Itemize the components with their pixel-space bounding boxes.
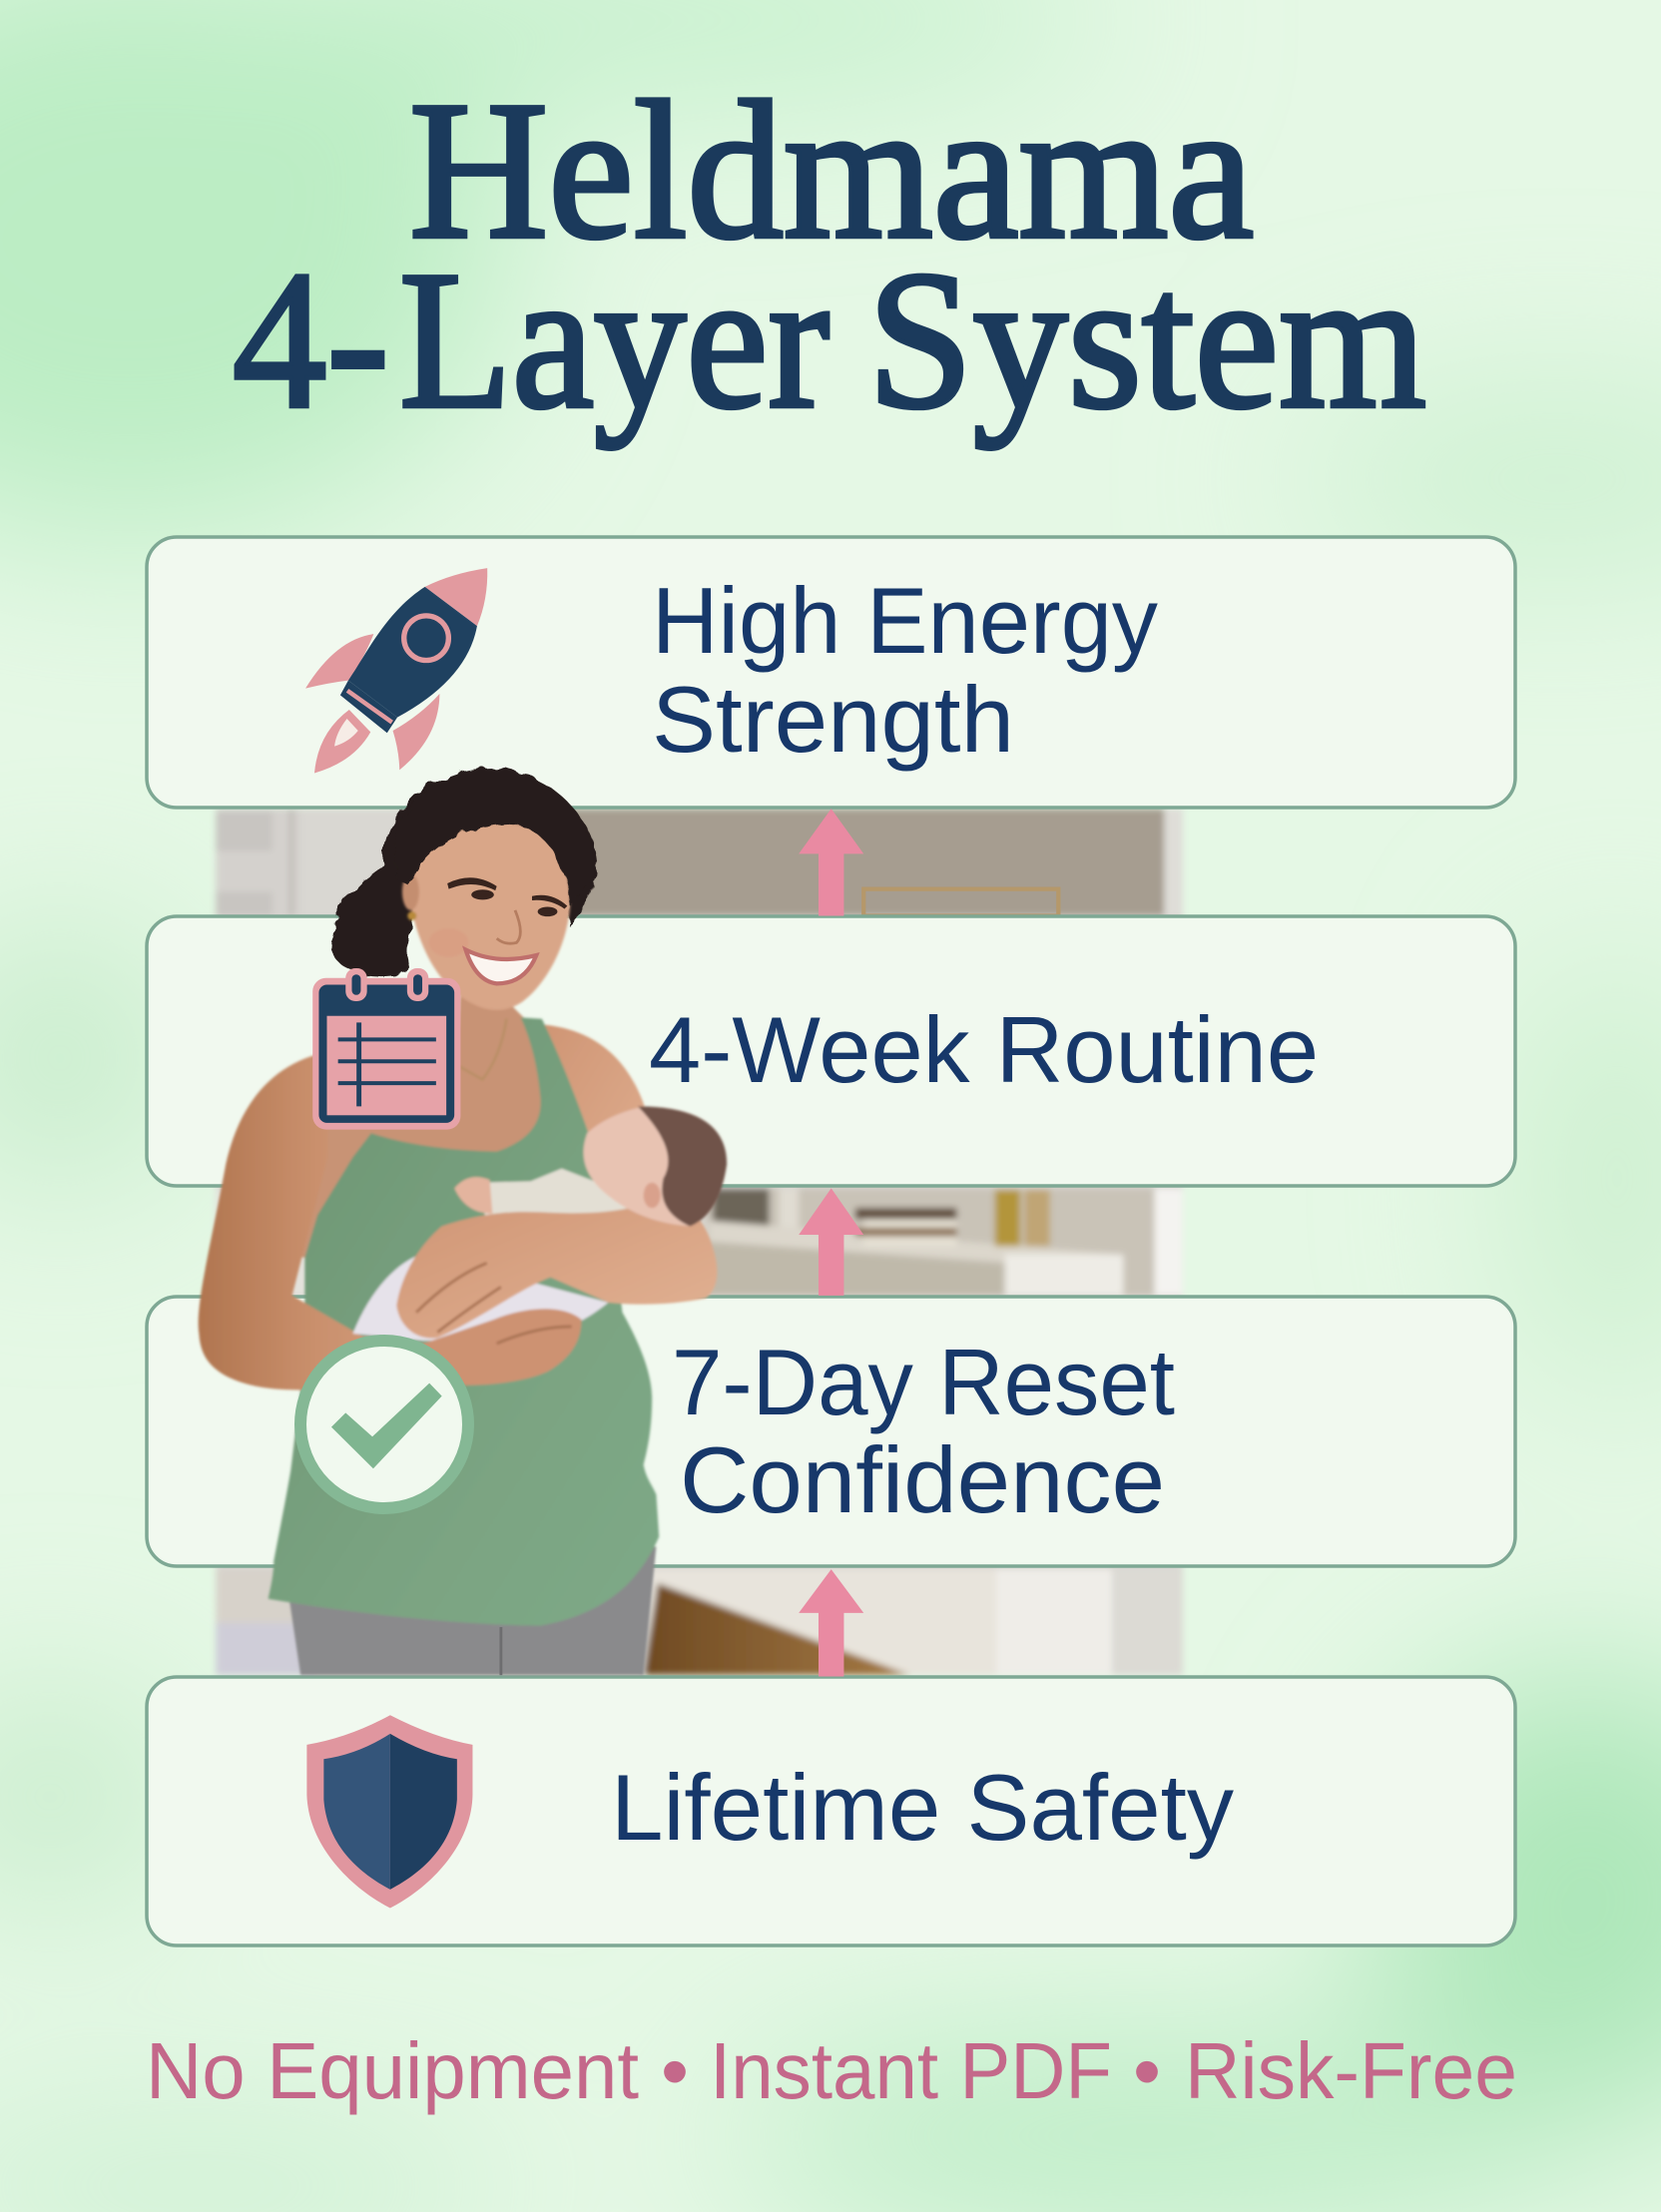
- lower hand: [423, 1309, 581, 1390]
- left arm: [199, 1051, 451, 1390]
- title: Heldmama: [409, 61, 1254, 279]
- title: 4-: [233, 231, 389, 449]
- photo: mother holding baby: [199, 768, 727, 1675]
- label: High Energy Strength: [652, 568, 1158, 772]
- title: [233, 61, 1426, 449]
- cheeks: [429, 928, 468, 957]
- right shoulder and upper arm: [542, 1024, 666, 1228]
- footer tagline: [146, 2026, 1517, 2115]
- nose shadow: [497, 910, 520, 943]
- baby head: [584, 1106, 727, 1227]
- baby lower blanket: [352, 1253, 608, 1341]
- panel: Lifetime Safety: [147, 1677, 1515, 1945]
- label: High Energy Strength: High Energy: [652, 568, 1158, 673]
- footer tagline: No Equipment: [146, 2026, 639, 2115]
- icon: rocket: [305, 568, 487, 773]
- forearm and hand: [396, 1197, 717, 1339]
- label: Lifetime Safety: Lifetime Safety: [611, 1755, 1234, 1860]
- footer tagline: •: [1133, 2026, 1161, 2115]
- baby hair: [638, 1106, 727, 1227]
- smile: [466, 949, 536, 983]
- label: 7-Day Reset Confidence: Confidence: [680, 1427, 1165, 1532]
- chest and neck: [299, 995, 557, 1258]
- hair top: [394, 768, 593, 906]
- baby ear: [644, 1183, 661, 1208]
- footer tagline: Instant PDF: [710, 2026, 1112, 2115]
- panel: 4-Week Routine: [147, 916, 1515, 1186]
- label: 7-Day Reset Confidence: [672, 1330, 1175, 1532]
- earring: [407, 911, 416, 920]
- hair back: [330, 768, 597, 976]
- finger shadows: [416, 1263, 572, 1344]
- tank top: [269, 1017, 659, 1626]
- background photo: room: [216, 809, 1183, 1675]
- baby hand: [454, 1177, 492, 1214]
- label: High Energy Strength: Strength: [652, 667, 1014, 772]
- icon: check badge: [300, 1341, 468, 1508]
- panel: High Energy Strength: [147, 537, 1515, 808]
- footer tagline: •: [661, 2026, 689, 2115]
- arrow 3: [799, 1569, 863, 1677]
- footer tagline: Risk-Free: [1185, 2026, 1517, 2115]
- eyes and brows: [447, 877, 567, 916]
- ear: [402, 873, 419, 910]
- title: Layer: [399, 231, 830, 449]
- arrow 2: [799, 1188, 863, 1296]
- label: 4-Week Routine: 4-Week Routine: [649, 997, 1319, 1102]
- arrow 1: [799, 809, 863, 916]
- baby body: [478, 1169, 652, 1231]
- icon: shield: [306, 1715, 472, 1909]
- title: System: [867, 231, 1426, 449]
- icon: calendar: [312, 968, 460, 1130]
- leggings: [286, 1546, 656, 1675]
- necklace: [460, 1019, 507, 1080]
- panel: 7-Day Reset Confidence: [147, 1297, 1515, 1566]
- face: [406, 823, 570, 1010]
- label: 7-Day Reset Confidence: 7-Day Reset: [672, 1330, 1175, 1434]
- leggings centre seam: [500, 1627, 502, 1675]
